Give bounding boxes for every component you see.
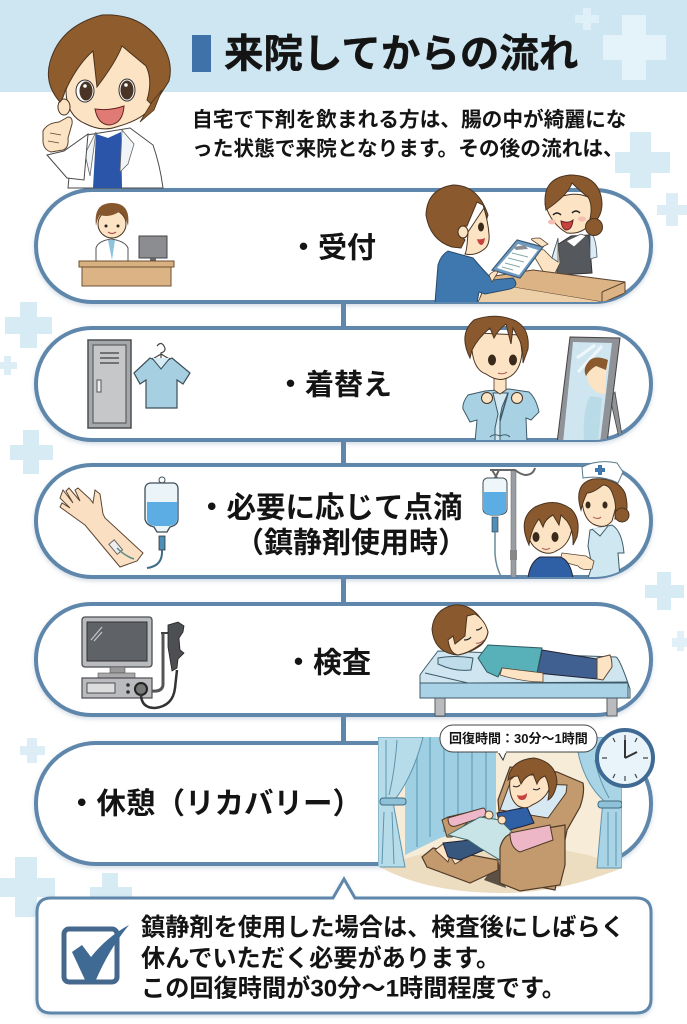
illustration: IV pole, boy and nurse	[483, 462, 629, 580]
doctor character	[43, 15, 170, 188]
illustration: boy changing into gown	[463, 316, 539, 442]
title: 来院してからの流れ	[224, 32, 578, 76]
icon: check mark box	[64, 925, 129, 982]
pill 5: recovery	[36, 725, 653, 897]
label: IV drip: ・必要に応じて点滴	[197, 492, 463, 524]
label: reception: ・受付	[289, 232, 376, 264]
label: changing clothes: ・着替え	[276, 368, 392, 402]
icon: IV bag	[145, 477, 178, 568]
illustration: patient handing clipboard to receptionist	[426, 175, 625, 303]
flow connector line	[341, 300, 346, 745]
doctor head	[66, 43, 158, 129]
callout text	[141, 914, 625, 1002]
icon: clock	[597, 730, 653, 786]
pill 4: examination	[36, 604, 651, 716]
icon: locker	[88, 340, 131, 428]
icon: doctor at desk	[79, 203, 174, 286]
doctor arm and thumb	[47, 134, 88, 180]
callout text: この回復時間が30分～1時間程度です。	[141, 974, 566, 1002]
pill 1: reception	[36, 175, 651, 303]
speech bubble: recovery time	[440, 725, 597, 760]
header band	[0, 0, 687, 92]
label: recovery: ・休憩（リカバリー）	[67, 788, 362, 820]
intro text: 自宅で下剤を飲まれる方は、腸の中が綺麗にな	[192, 108, 626, 132]
label: examination: ・検査	[284, 646, 371, 680]
intro text	[192, 108, 626, 160]
callout text: 鎮静剤を使用した場合は、検査後にしばらく	[141, 914, 625, 942]
icon: endoscope monitor and unit	[82, 617, 184, 708]
counter	[478, 270, 625, 303]
speech bubble: recovery time: 回復時間：30分～1時間	[449, 731, 588, 746]
room	[387, 752, 620, 872]
patient	[435, 251, 516, 303]
receptionist	[557, 235, 592, 275]
icon: arm with IV line	[60, 488, 143, 567]
pill 3: IV drip if needed	[36, 462, 651, 580]
right armrest	[500, 825, 565, 891]
callout: sedation note	[37, 879, 651, 1013]
title marker	[192, 35, 211, 72]
nurse	[588, 525, 624, 578]
illustration: patient lying on exam bed	[420, 605, 630, 716]
pill 2: changing clothes	[36, 316, 651, 443]
recliner	[498, 767, 584, 890]
illustration: standing mirror	[557, 337, 623, 443]
boy	[528, 557, 573, 578]
icon: gown on hanger	[134, 344, 190, 408]
intro text: った状態で来院となります。その後の流れは、	[192, 138, 624, 160]
illustration: resting in recliner	[378, 737, 623, 897]
label: IV drip	[197, 492, 467, 560]
label: IV drip: （鎮静剤使用時）	[235, 526, 467, 560]
patient	[497, 807, 534, 832]
callout text: 休んでいただく必要があります。	[141, 944, 500, 972]
head	[510, 775, 550, 808]
doctor body	[67, 128, 163, 188]
